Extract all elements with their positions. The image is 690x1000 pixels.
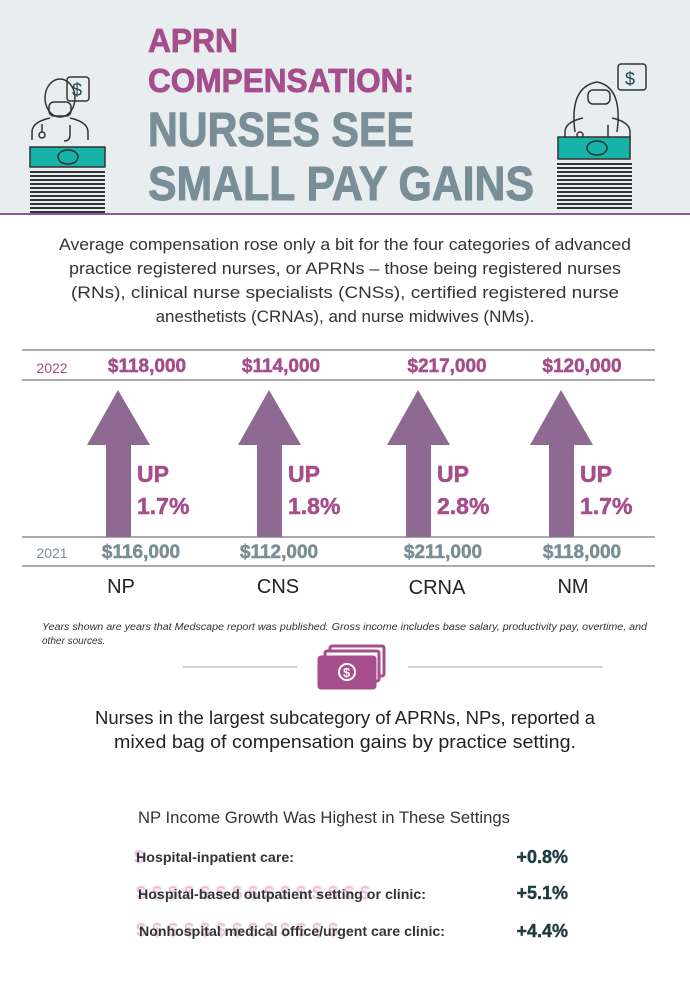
- list rows: Hospital-inpatient care:: [136, 850, 294, 865]
- intro text: (RNs), clinical nurse specialists (CNSs), certified registered nurse: [71, 283, 619, 302]
- up percentages: UP: [580, 461, 612, 487]
- list rows: $$$$$$$$$$$$$$$: [136, 883, 376, 903]
- list rows: +4.4%: [516, 921, 568, 941]
- title: APRN: [148, 22, 238, 59]
- footnote: [42, 622, 647, 647]
- intro text: Average compensation rose only a bit for the four categories of advanced: [59, 235, 631, 254]
- chart lines: [22, 350, 655, 566]
- title: [148, 22, 534, 211]
- footnote: other sources.: [42, 636, 105, 647]
- icon: money stack: [319, 646, 384, 688]
- arrows: [87, 390, 593, 537]
- 2021 values: $116,000: [102, 542, 180, 563]
- category labels: CNS: [257, 576, 299, 598]
- title: SMALL PAY GAINS: [148, 158, 534, 211]
- icon: male nurse with money stack: $: [72, 80, 82, 100]
- 2021 values: $118,000: [543, 542, 621, 563]
- list rows: Nonhospital medical office/urgent care clinic:: [139, 924, 445, 939]
- 2021 values: 2021: [36, 545, 68, 561]
- title: NURSES SEE: [148, 104, 414, 157]
- 2022 values: 2022: [36, 360, 68, 376]
- section text: mixed bag of compensation gains by practice setting.: [114, 732, 576, 752]
- intro text: [59, 235, 631, 326]
- up percentages: [137, 461, 632, 519]
- section text: [95, 708, 596, 752]
- icon: money stack: $: [343, 665, 351, 680]
- header background: [0, 0, 690, 215]
- 2022 values: [36, 356, 622, 377]
- up percentages: 1.7%: [137, 493, 189, 519]
- 2022 values: $118,000: [108, 356, 186, 377]
- 2022 values: $114,000: [242, 356, 320, 377]
- up percentages: 1.8%: [288, 493, 340, 519]
- icon: male nurse with money stack: [30, 77, 105, 212]
- up percentages: 2.8%: [437, 493, 489, 519]
- list heading: NP Income Growth Was Highest in These Settings: [138, 808, 510, 827]
- category labels: NP: [107, 576, 135, 598]
- category labels: CRNA: [409, 577, 466, 599]
- category labels: NM: [557, 576, 589, 598]
- list rows: +0.8%: [516, 847, 568, 867]
- section text: Nurses in the largest subcategory of APRNs, NPs, reported a: [95, 708, 596, 728]
- list rows: [134, 847, 568, 941]
- list rows: Hospital-based outpatient setting or clinic:: [138, 887, 426, 902]
- list rows: $$$$$$$$$$$$$: [136, 920, 344, 940]
- up percentages: UP: [137, 461, 169, 487]
- up percentages: 1.7%: [580, 493, 632, 519]
- icon: female nurse with money stack: $: [625, 69, 635, 89]
- 2021 values: [36, 542, 621, 563]
- up percentages: UP: [288, 461, 320, 487]
- up percentages: UP: [437, 461, 469, 487]
- category labels: [107, 576, 589, 599]
- title: COMPENSATION:: [148, 62, 414, 99]
- 2021 values: $211,000: [404, 542, 482, 563]
- intro text: practice registered nurses, or APRNs – those being registered nurses: [69, 259, 621, 278]
- icon: female nurse with money stack: [557, 64, 646, 208]
- list rows: $: [134, 847, 144, 867]
- footnote: Years shown are years that Medscape report was published. Gross income includes base salary, productivity pay, overtime, and: [42, 622, 647, 633]
- 2022 values: $217,000: [407, 356, 487, 377]
- 2021 values: $112,000: [240, 542, 318, 563]
- intro text: anesthetists (CRNAs), and nurse midwives (NMs).: [156, 307, 534, 326]
- 2022 values: $120,000: [542, 356, 622, 377]
- list rows: +5.1%: [516, 883, 568, 903]
